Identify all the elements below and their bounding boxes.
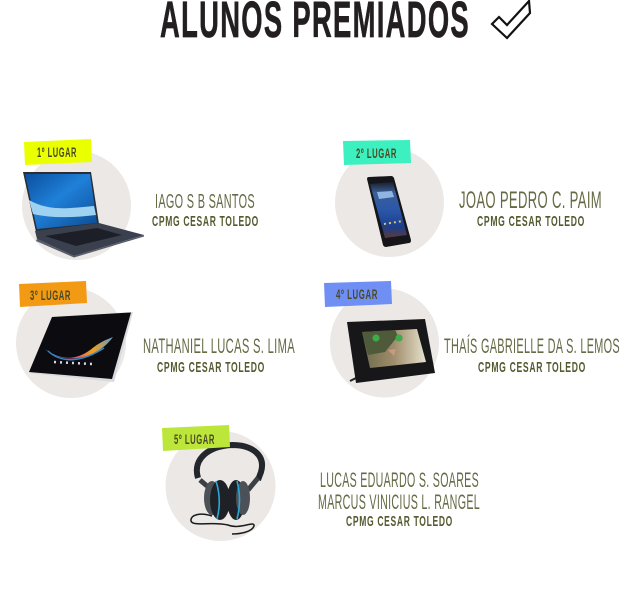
background circle 2 bbox=[335, 148, 444, 257]
school: CPMG CESAR TOLEDO bbox=[346, 513, 453, 530]
icon: headphones bbox=[191, 445, 262, 534]
icon: check mark bbox=[492, 1, 530, 38]
icon: tablet bbox=[29, 312, 133, 382]
icon: laptop bbox=[23, 172, 144, 258]
label: 4º lugar: 4º LUGAR bbox=[336, 287, 378, 302]
panel: 3rd place bbox=[16, 281, 295, 398]
label: 3º lugar: 3º LUGAR bbox=[30, 288, 71, 303]
panel: 4th place bbox=[324, 281, 620, 398]
school: CPMG CESAR TOLEDO bbox=[157, 359, 265, 376]
name: Lucas: LUCAS EDUARDO S. SOARES bbox=[320, 469, 479, 492]
background circle 4 bbox=[330, 288, 439, 398]
icon: photo frame bbox=[347, 319, 435, 383]
label: 2º lugar: 2º LUGAR bbox=[356, 146, 397, 161]
name: Iago: IAGO S B SANTOS bbox=[155, 191, 255, 213]
label: 2º lugar bbox=[343, 140, 411, 165]
label: 1º lugar: 1º LUGAR bbox=[37, 145, 77, 160]
label: 5º lugar bbox=[162, 425, 230, 451]
name: Nathaniel: NATHANIEL LUCAS S. LIMA bbox=[143, 335, 295, 358]
label: 3º lugar bbox=[19, 281, 87, 307]
panel: 1st place bbox=[22, 139, 259, 260]
panel: 5th place bbox=[162, 425, 480, 541]
icon: smartphone bbox=[367, 176, 411, 247]
label: 1º lugar bbox=[24, 139, 92, 165]
label: 5º lugar: 5º LUGAR bbox=[174, 432, 215, 447]
panel: 2nd place bbox=[335, 140, 602, 257]
background circle 5 bbox=[166, 431, 276, 541]
background circle 3 bbox=[16, 288, 126, 398]
name: Marcus: MARCUS VINICIUS L. RANGEL bbox=[318, 491, 480, 514]
label: 4º lugar bbox=[324, 281, 392, 307]
background circle 1 bbox=[22, 151, 131, 260]
school: CPMG CESAR TOLEDO bbox=[152, 213, 259, 230]
